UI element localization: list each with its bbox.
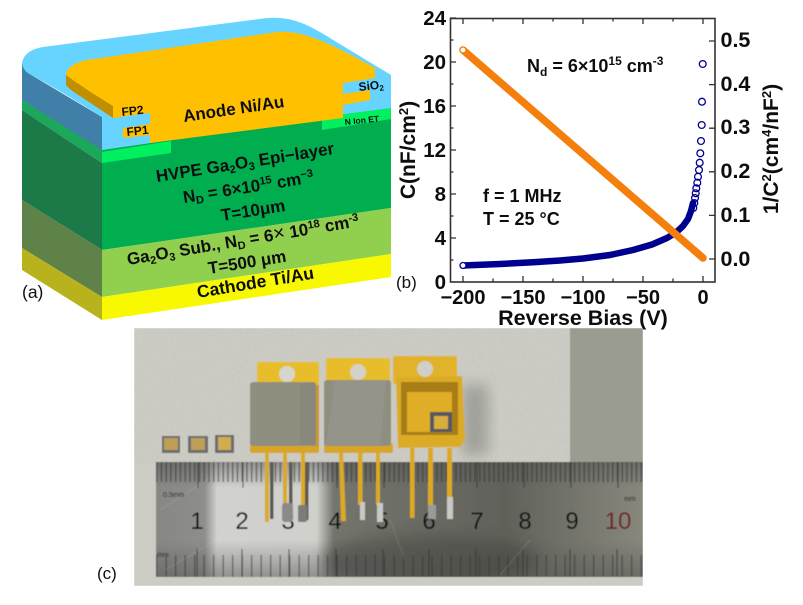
label: substrate text: 3 <box>168 251 177 264</box>
annotation: doping concentration: d <box>540 65 547 79</box>
layer: Ga2O3 substrate <box>102 208 391 297</box>
ruler numbers: 8 <box>518 508 532 535</box>
right axis tick labels <box>720 28 750 271</box>
annotation: measurement conditions: f = 1 MHz <box>483 186 562 206</box>
layer: SiO2 top surface and front <box>22 18 391 150</box>
photo background paper <box>134 328 643 586</box>
annotation: measurement conditions <box>483 186 562 229</box>
right axis tick labels: 0.1 <box>720 203 750 227</box>
ruler unit labels: mm <box>624 496 636 503</box>
annotation: doping concentration: 15 <box>608 54 622 68</box>
ruler numbers <box>190 508 631 535</box>
x axis tick labels: −150 <box>500 287 546 309</box>
x axis tick labels: −50 <box>626 287 660 309</box>
ruler unit labels: 0.5mm <box>163 492 185 499</box>
label: epi-layer text: −3 <box>300 168 314 181</box>
left y axis title: C(nF/cm <box>397 115 420 199</box>
left axis tick labels: 8 <box>435 183 446 206</box>
ruler numbers: 6 <box>422 508 436 535</box>
label: epi-layer text: N <box>182 186 197 207</box>
ruler numbers: 10 <box>605 508 631 535</box>
dark backing sheet <box>570 328 643 463</box>
left axis tick labels: 4 <box>435 227 447 250</box>
capacitance curve (blue) <box>460 61 706 268</box>
label: Cathode Ti/Au: Cathode Ti/Au <box>195 263 315 302</box>
label: substrate text: D <box>237 239 247 253</box>
left axis tick labels: 0 <box>435 271 446 294</box>
right y axis title: ) <box>760 84 783 91</box>
label: epi-layer text: 3 <box>248 161 256 173</box>
label: epi-layer text: 15 <box>259 174 273 188</box>
layer: cathode Ti/Au <box>102 254 391 320</box>
panel label (c): (c) <box>97 564 117 583</box>
label: epi-layer text: D <box>195 194 205 207</box>
annotation: doping concentration: N <box>527 56 540 76</box>
chart frame and ticks <box>450 18 715 282</box>
label: substrate text: cm <box>319 213 351 237</box>
label: substrate text: -3 <box>348 211 359 225</box>
anode Ni/Au metal <box>66 32 375 143</box>
annotation: doping concentration: cm <box>622 56 653 76</box>
label: FP2: FP2 <box>121 103 145 119</box>
label: epi-layer text <box>155 139 336 225</box>
label: epi-layer text: Epi−layer <box>253 139 336 170</box>
panel a: device cross-section diagram <box>22 18 391 320</box>
right axis tick labels: 0.0 <box>720 247 750 271</box>
annotation: doping concentration: -3 <box>653 54 664 68</box>
label: substrate text: 18 <box>307 218 321 232</box>
N ion edge termination, left <box>102 141 171 163</box>
ruler unit labels <box>157 492 636 559</box>
label: substrate text: × 10 <box>271 220 310 245</box>
N ion edge termination, right <box>322 108 391 130</box>
left side face of device <box>22 63 102 320</box>
right y axis title: (cm <box>760 137 783 174</box>
label: SiO2: SiO <box>358 78 380 94</box>
label: N Ion ET: N Ion ET <box>344 113 380 127</box>
1/C^2 line (orange) <box>460 47 703 258</box>
right y axis title: 2 <box>759 174 774 181</box>
label: substrate text: Ga <box>126 246 151 269</box>
FP1 field plate <box>123 124 150 138</box>
left axis tick labels: 12 <box>423 139 446 162</box>
packaged device 1 <box>250 362 319 522</box>
right y axis title: 4 <box>759 129 774 137</box>
label: epi-layer text: cm <box>271 169 303 193</box>
ruler numbers: 7 <box>470 508 484 535</box>
left axis tick labels: 16 <box>423 95 446 118</box>
panel label (b): (b) <box>396 273 417 292</box>
label: epi-layer text: T=10μm <box>220 196 287 225</box>
packaged device 3, open with mounted chip <box>393 356 465 519</box>
left y axis title: 2 <box>396 108 411 115</box>
label: epi-layer text: = 6×10 <box>202 176 262 204</box>
steel ruler <box>156 462 643 586</box>
ruler numbers: 9 <box>565 508 579 535</box>
annotation: doping concentration: = 6×10 <box>547 56 608 76</box>
anode side wall <box>66 75 113 118</box>
ruler numbers: 1 <box>190 508 204 535</box>
right axis tick labels: 0.5 <box>720 28 750 52</box>
bare chips <box>162 435 234 453</box>
label: substrate text: T=500 μm <box>207 247 288 278</box>
ruler numbers: 2 <box>235 508 249 535</box>
right y axis title: /nF <box>760 98 783 130</box>
label: substrate text: O <box>154 243 170 264</box>
right y axis title: 1/C <box>760 181 783 214</box>
label: substrate text <box>125 209 361 278</box>
label: substrate text: 2 <box>149 254 157 267</box>
layer: HVPE epi-layer <box>102 108 391 250</box>
right axis tick labels: 0.3 <box>720 115 750 139</box>
right y axis title: 2 <box>759 91 774 98</box>
x axis title: Reverse Bias (V) <box>498 306 668 330</box>
x axis tick labels: 0 <box>697 287 709 309</box>
paper texture <box>134 328 570 463</box>
label: substrate text: Sub., N <box>173 232 239 261</box>
label: Anode Ni/Au: Anode Ni/Au <box>182 92 285 126</box>
label: epi-layer text: O <box>233 153 250 173</box>
ruler numbers: 3 <box>281 508 295 535</box>
label: SiO2: 2 <box>379 83 385 93</box>
left y axis title: ) <box>397 101 420 108</box>
x axis tick labels: −100 <box>560 287 606 309</box>
left axis tick labels: 20 <box>423 51 446 74</box>
x axis tick labels <box>440 287 709 309</box>
panel label (a): (a) <box>22 282 43 302</box>
label: FP1: FP1 <box>126 123 150 139</box>
panel c: photograph of packaged devices <box>134 328 643 586</box>
shadow by open package <box>462 385 488 455</box>
label: substrate text: = 6 <box>243 226 275 249</box>
ruler numbers: 4 <box>328 508 342 535</box>
ruler unit labels: mm <box>157 552 169 559</box>
label: epi-layer text: 2 <box>229 164 237 176</box>
x axis tick labels: −200 <box>440 287 486 309</box>
right axis tick labels: 0.4 <box>720 72 750 96</box>
left axis tick labels: 24 <box>423 7 447 30</box>
ruler numbers: 5 <box>375 508 389 535</box>
label: epi-layer text: HVPE Ga <box>155 156 230 186</box>
annotation: measurement conditions: T = 25 °C <box>483 209 560 229</box>
right axis tick labels: 0.2 <box>720 159 750 183</box>
panel b: C-V chart <box>396 7 783 330</box>
left axis tick labels <box>423 7 447 294</box>
packaged device 2 <box>324 358 393 522</box>
